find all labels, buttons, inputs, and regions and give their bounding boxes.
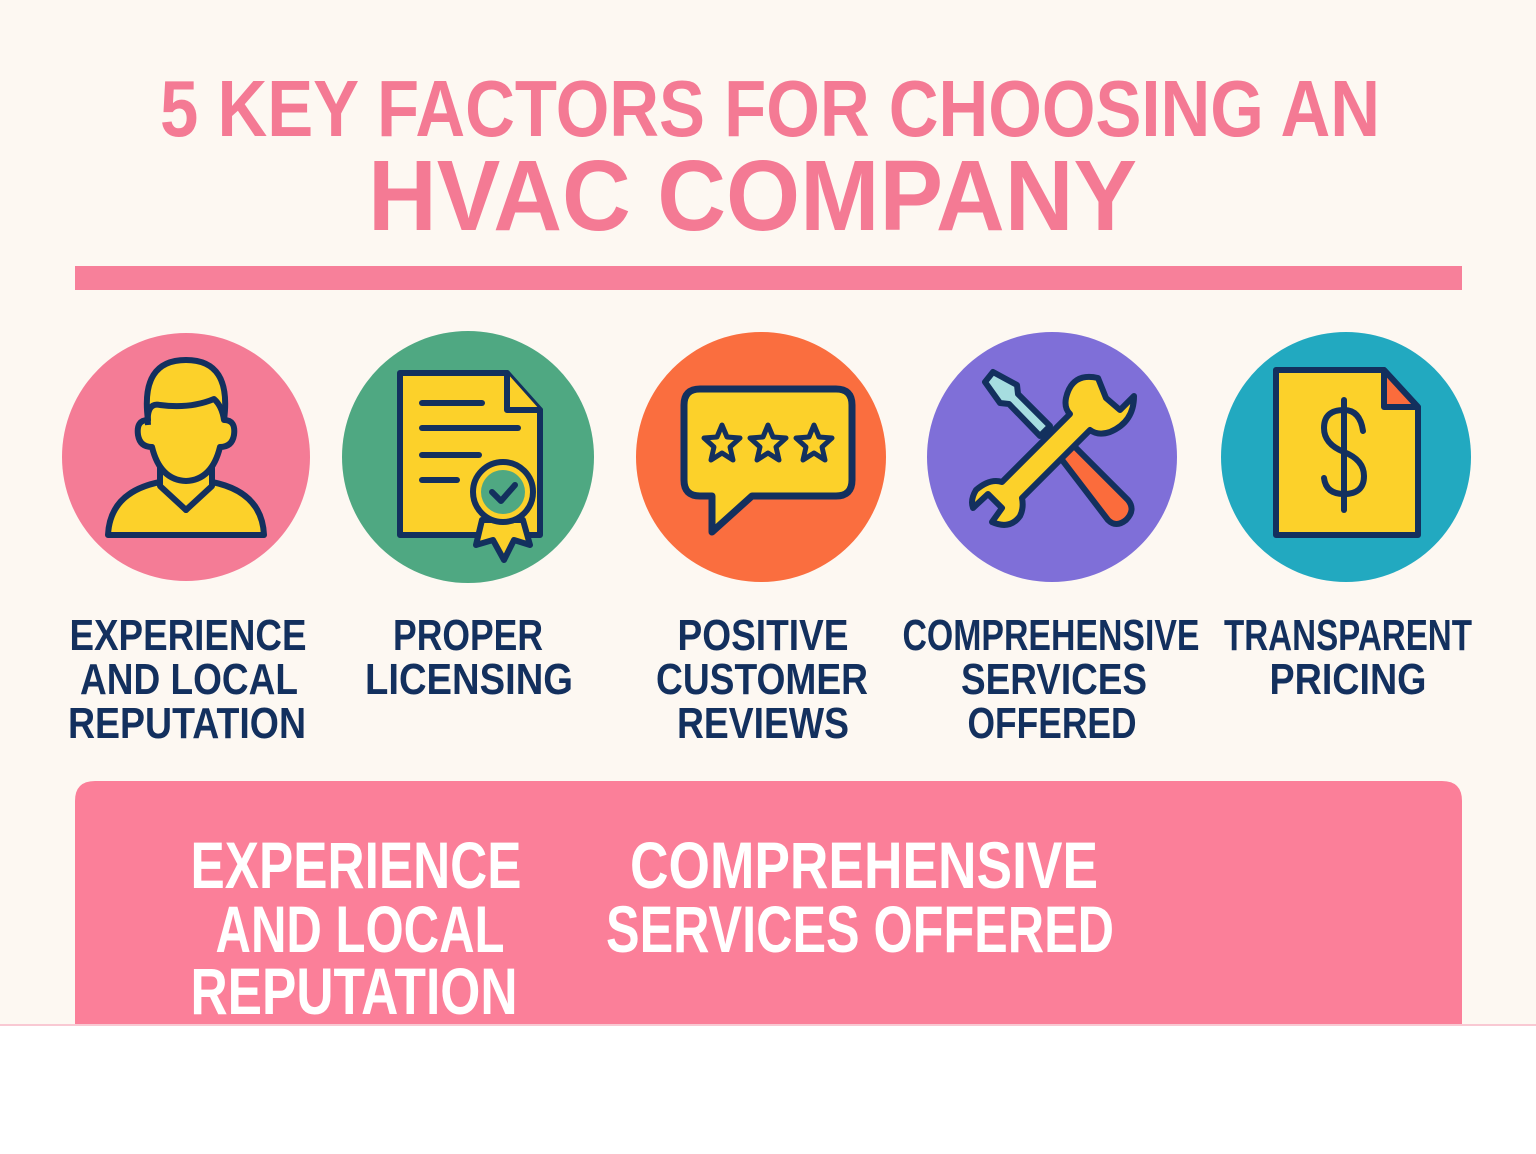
- factor 2: licensing: [342, 331, 594, 704]
- panel text: experience: AND LOCAL: [216, 892, 504, 966]
- label: experience: AND LOCAL: [80, 655, 298, 704]
- label: pricing: [1224, 611, 1472, 704]
- label: reviews: [656, 611, 868, 748]
- label: services: [902, 611, 1200, 748]
- label: services: SERVICES: [961, 655, 1147, 704]
- bottom panel: [75, 781, 1462, 1028]
- icon: wrench and screwdriver: [927, 332, 1177, 582]
- icon: price document: [1221, 332, 1471, 582]
- label: reviews: POSITIVE: [678, 611, 848, 660]
- label: pricing: PRICING: [1270, 655, 1426, 704]
- label: licensing: PROPER: [393, 611, 543, 660]
- title underline bar: [75, 266, 1462, 290]
- factor 4: services: [902, 332, 1200, 748]
- icon: person: [62, 333, 310, 581]
- label: reviews: CUSTOMER: [656, 655, 868, 704]
- title: [160, 64, 1380, 252]
- panel text: experience: EXPERIENCE: [190, 828, 522, 902]
- icon: certificate: [342, 331, 594, 583]
- label: reviews: REVIEWS: [677, 699, 849, 748]
- label: experience: EXPERIENCE: [70, 611, 306, 660]
- panel text: services: [606, 828, 1114, 966]
- title: 5 KEY FACTORS FOR CHOOSING AN: [160, 64, 1380, 153]
- label: experience: [68, 611, 306, 748]
- icon: speech bubble with stars: [636, 332, 886, 582]
- factor 3: reviews: [636, 332, 886, 748]
- panel text: experience: [190, 828, 522, 1028]
- panel text: experience: REPUTATION: [190, 954, 518, 1028]
- label: licensing: [365, 611, 573, 704]
- panel text: services: COMPREHENSIVE: [630, 828, 1098, 902]
- title: HVAC COMPANY: [368, 140, 1137, 252]
- label: licensing: LICENSING: [365, 655, 573, 704]
- factor 5: pricing: [1221, 332, 1472, 704]
- panel text: services: SERVICES OFFERED: [606, 892, 1114, 966]
- label: services: OFFERED: [968, 699, 1136, 748]
- label: experience: REPUTATION: [68, 699, 306, 748]
- label: services: COMPREHENSIVE: [902, 611, 1200, 660]
- factor 1: experience: [62, 333, 310, 748]
